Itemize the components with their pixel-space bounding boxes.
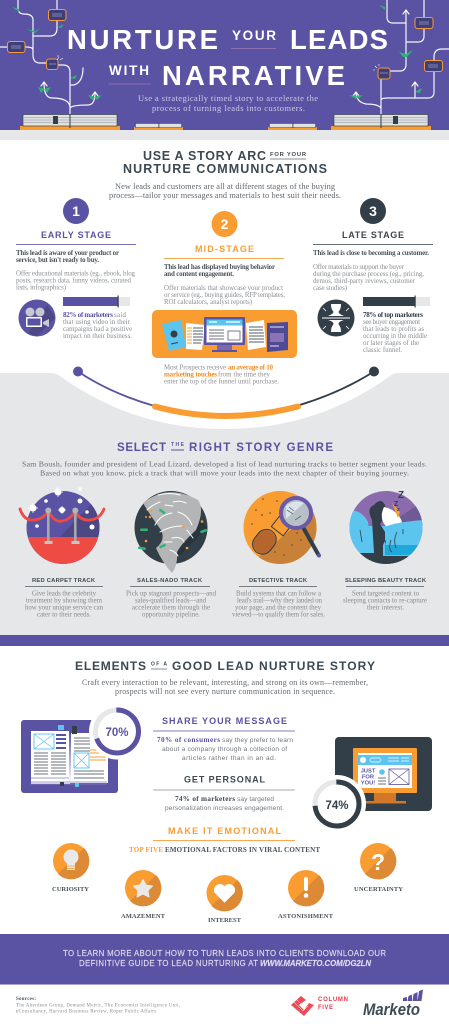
chart: 74% donut: 74%: [325, 800, 349, 812]
subheading: SHARE YOUR MESSAGE: [162, 716, 287, 726]
subtitle: Use a strategically timed story to accelerate the: [138, 93, 318, 103]
chart caption: EMOTIONAL FACTORS IN VIRAL CONTENT: [165, 846, 320, 854]
body text: say targeted: [237, 796, 274, 803]
illustration: open magazine: [21, 720, 118, 793]
stat text: said: [114, 312, 127, 319]
stage offer: [16, 270, 136, 292]
body text: 70% of consumers: [157, 736, 220, 744]
stage offer: case studies): [313, 285, 347, 292]
track description: opportunity pipeline.: [142, 612, 200, 618]
panel: call to action: WWW.MARKETO.COM/DG2LN: [260, 959, 371, 968]
stage heading: MID-STAGE: [195, 244, 254, 254]
stage heading: LATE STAGE: [342, 230, 404, 240]
panel: call to action: TO LEARN MORE ABOUT HOW TO TURN LEADS INTO CLIENTS DOWNLOAD OUR: [63, 949, 386, 958]
icon: curiosity: [52, 843, 89, 893]
stat text: campaigns had a positive: [63, 326, 132, 333]
icon: curiosity: CURIOSITY: [52, 886, 89, 893]
illustration: small right book: [268, 123, 317, 130]
title: [67, 24, 388, 91]
section: get personal: [153, 774, 295, 812]
panel: detective track: [232, 491, 325, 618]
body text: [165, 795, 284, 812]
stage description: This lead has displayed buying behavior: [164, 264, 275, 271]
track title: DETECTIVE TRACK: [249, 578, 308, 584]
icon: video camera: [18, 300, 56, 336]
track description: treatment by showing them: [26, 598, 103, 604]
sources: [16, 997, 180, 1014]
subheading: MAKE IT EMOTIONAL: [168, 826, 282, 836]
stage heading: [313, 230, 433, 245]
panel: sleeping beauty track: [343, 490, 430, 612]
icon text: zzz: Z: [398, 490, 404, 501]
body text: personalization increases engagement.: [165, 805, 284, 812]
heading: elements of a good lead nurture story: [75, 659, 375, 673]
icon: amazement: AMAZEMENT: [121, 913, 166, 920]
stat text: 78% of top marketers: [363, 311, 423, 319]
sources: eConsultancy, Harvard Business Review, Roper Public Affairs: [16, 1010, 156, 1014]
heading: elements of a good lead nurture story: OF A: [151, 662, 167, 668]
track description: [126, 590, 217, 618]
chart: story arc curve: [73, 366, 379, 416]
stat text: from the time they: [218, 372, 271, 378]
chart: 70% donut: [89, 704, 145, 760]
icon: uncertainty: UNCERTAINTY: [354, 886, 403, 893]
stage description: service, but isn't ready to buy.: [16, 257, 99, 264]
icon: astonishment: [278, 870, 334, 920]
heading: select the right story genre: RIGHT STORY GENRE: [189, 442, 333, 454]
track description: [232, 590, 325, 618]
number badge 3: 3: [369, 203, 377, 219]
track title: SLEEPING BEAUTY TRACK: [345, 578, 427, 584]
heading: use a story arc: [123, 149, 327, 176]
number badge 2: [212, 211, 238, 237]
illustration: small left book: [134, 123, 183, 130]
heading: select the right story genre: THE: [171, 442, 185, 448]
heading: use a story arc: USE A STORY ARC: [143, 149, 266, 163]
logo: column five: COLUMN: [318, 997, 348, 1003]
intro text: genre: [22, 460, 427, 478]
stage offer: [164, 285, 285, 306]
subheading: GET PERSONAL: [184, 774, 266, 784]
track description: accelerate them through the: [132, 604, 210, 612]
stage offer: lists, infographics): [16, 284, 66, 292]
stage offer: Offer materials to support the buyer: [313, 264, 405, 271]
stage description: This lead is close to becoming a customer.: [313, 250, 429, 257]
body text: say they prefer to learn: [222, 737, 293, 744]
heading: select the right story genre: SELECT: [117, 442, 166, 454]
chart caption: TOP FIVE: [129, 846, 163, 854]
title: NURTURE: [67, 24, 218, 55]
heading: use a story arc: NURTURE COMMUNICATIONS: [123, 162, 327, 176]
divider band: [0, 635, 449, 646]
track description: sleeping contacts to re-capture: [343, 598, 427, 604]
panel: early stage: [16, 198, 136, 340]
sources: Sources:: [16, 997, 36, 1002]
icon: uncertainty: [354, 843, 403, 893]
illustration: left story tree: [0, 0, 102, 118]
stat text: Most Prospects receive: [164, 364, 226, 372]
panel: late stage: [313, 198, 433, 354]
stage offer: or service (eg., buying guides, RFP templates,: [164, 292, 285, 299]
track description: Send targeted content to: [352, 590, 420, 598]
title: NARRATIVE: [162, 60, 345, 91]
panel: mid stage: [152, 211, 297, 386]
subtitle: [138, 93, 318, 113]
track description: cater to their needs.: [37, 612, 91, 618]
track description: sales-qualified leads—and: [135, 598, 207, 604]
number badge 1: [63, 198, 89, 224]
intro text: elements: Craft every interaction to be relevant, interesting, and strong on its own—remember,: [82, 678, 368, 687]
number badge 2: 2: [221, 216, 229, 232]
stat text: an average of 10: [228, 364, 274, 372]
panel: red carpet track: [20, 487, 110, 618]
stat text: or later stages of the: [363, 340, 419, 347]
track description: lead's trail—why they landed on: [237, 598, 323, 604]
stage description: [164, 264, 275, 278]
panel: sales-nado track: [126, 491, 217, 618]
track description: your page, and the content they: [235, 604, 322, 612]
body text: articles rather than in an ad.: [182, 755, 276, 762]
stat text: [363, 311, 427, 354]
icon text: zzz: [394, 490, 404, 512]
intro text: story arc: New leads and customers are all at different stages of the buying: [115, 182, 335, 191]
illustration: large right book: [331, 114, 431, 130]
screen text: [361, 768, 376, 786]
stat text: that using video in their: [63, 319, 131, 326]
illustration: materials panel: [152, 310, 297, 358]
stage heading: [16, 230, 136, 245]
icon: magnifying glass over footprint: [244, 491, 321, 564]
heading: elements of a good lead nurture story: ELEMENTS: [75, 659, 146, 673]
number badge 1: 1: [72, 203, 80, 219]
logo: column five: FIVE: [318, 1005, 333, 1011]
icon: uncertainty: ?: [371, 849, 385, 875]
logo: marketo: Marketo: [363, 1001, 420, 1019]
icon: funnel: [318, 300, 354, 336]
icon: amazement: [121, 870, 166, 920]
illustration: right story tree: [349, 0, 449, 118]
track description: their interest.: [367, 604, 404, 612]
stat text: [63, 311, 132, 340]
stage offer: Offer educational materials (eg., ebook, blog: [16, 270, 136, 278]
stage description: This lead is aware of your product or: [16, 250, 119, 257]
sources: The Aberdeen Group, Demand Metric, The Economist Intelligence Unit,: [16, 1004, 180, 1008]
track description: [25, 590, 104, 618]
chart: 70% donut: 70%: [105, 727, 129, 739]
stat text: 82% of marketers: [63, 311, 113, 319]
icon: astonishment: ASTONISHMENT: [278, 913, 334, 920]
track title: SALES-NADO TRACK: [137, 578, 203, 584]
screen text: YOU!: [361, 780, 375, 786]
chart: 74% donut: [308, 775, 366, 833]
stage offer: posts, research data, funny videos, curated: [16, 278, 132, 284]
heading: elements of a good lead nurture story: GOOD LEAD NURTURE STORY: [172, 659, 375, 673]
body text: about a company through a collection of: [162, 746, 287, 753]
stat text: impact on their business.: [63, 333, 132, 340]
panel: header: [0, 0, 449, 140]
stat bar 78%: [363, 296, 430, 308]
logo: marketo: [363, 990, 423, 1019]
stage description: [16, 250, 119, 264]
logo: column five: [291, 996, 348, 1016]
body text: [157, 736, 293, 762]
icon: sleeping figure: [350, 491, 422, 564]
stat bar 82%: [63, 296, 130, 308]
panel: call to action: [0, 934, 449, 985]
icon text: zzz: Z: [394, 501, 399, 508]
screen text: JUST: [361, 768, 376, 774]
stage offer: Offer materials that showcase your product: [164, 285, 283, 292]
icon text: zzz: Z: [397, 507, 400, 512]
intro text: genre: Sam Boush, founder and president of Lead Lizard, developed a list of lead nurturing tracks to better segment your leads.: [22, 460, 427, 468]
title: LEADS: [290, 24, 388, 55]
icon: velvet ropes: [20, 487, 110, 567]
stage heading: EARLY STAGE: [41, 230, 111, 240]
heading: select the right story genre: [117, 442, 333, 454]
stat text: that leads to profits as: [363, 326, 424, 333]
stat text: enter the top of the funnel until purchase.: [164, 378, 279, 386]
track description: how your unique service can: [25, 604, 104, 612]
icon: interest: INTEREST: [208, 917, 242, 924]
track description: Build systems that can follow a: [236, 590, 321, 598]
intro text: elements: [82, 678, 368, 696]
stat text: marketing touches: [164, 370, 217, 378]
heading: use a story arc: FOR YOUR: [270, 152, 307, 158]
stage description: and content engagement.: [164, 271, 234, 278]
stage offer: during the purchase process (eg., pricing,: [313, 271, 424, 278]
title: WITH: [109, 63, 149, 78]
title: YOUR: [232, 28, 276, 43]
illustration: monitor: [335, 737, 432, 811]
panel: call to action: DEFINITIVE GUIDE TO LEAD NURTURING AT: [79, 959, 258, 968]
intro text: story arc: process—tailor your messages and materials to best suit their needs.: [109, 191, 341, 200]
intro text: story arc: [109, 182, 341, 200]
stat text: occurring in the middle: [363, 333, 427, 340]
section: share your message: [153, 716, 295, 762]
track title: RED CARPET TRACK: [32, 578, 96, 584]
track description: Pick up stagnant prospects—and: [126, 590, 217, 598]
intro text: genre: Based on what you know, pick a track that will move your leads into the next chapter of their buying journey.: [40, 468, 409, 478]
screen text: FOR: [362, 774, 375, 780]
stat text: see buyer engagement: [363, 319, 420, 326]
body text: 74% of marketers: [175, 795, 235, 803]
stage offer: ROI calculators, analyst reports): [164, 299, 252, 306]
stage offer: [313, 264, 424, 292]
illustration: large left book: [20, 114, 120, 130]
track description: [343, 590, 427, 612]
number badge 3: [360, 198, 386, 224]
section: make it emotional: [52, 826, 403, 924]
icon: tornado: [134, 491, 208, 573]
track description: Give leads the celebrity: [32, 590, 97, 598]
subtitle: process of turning leads into customers.: [152, 103, 305, 113]
panel: story genre background: [0, 373, 449, 635]
stage heading: [164, 244, 284, 259]
stat text: classic funnel.: [363, 347, 402, 354]
intro text: elements: prospects will not see every nurture communication in sequence.: [115, 687, 335, 696]
track description: viewed—to qualify them for sales.: [232, 612, 325, 618]
stage offer: demos, third-party reviews, customer: [313, 278, 416, 285]
icon: interest: [206, 875, 243, 924]
stat text: [164, 364, 279, 386]
